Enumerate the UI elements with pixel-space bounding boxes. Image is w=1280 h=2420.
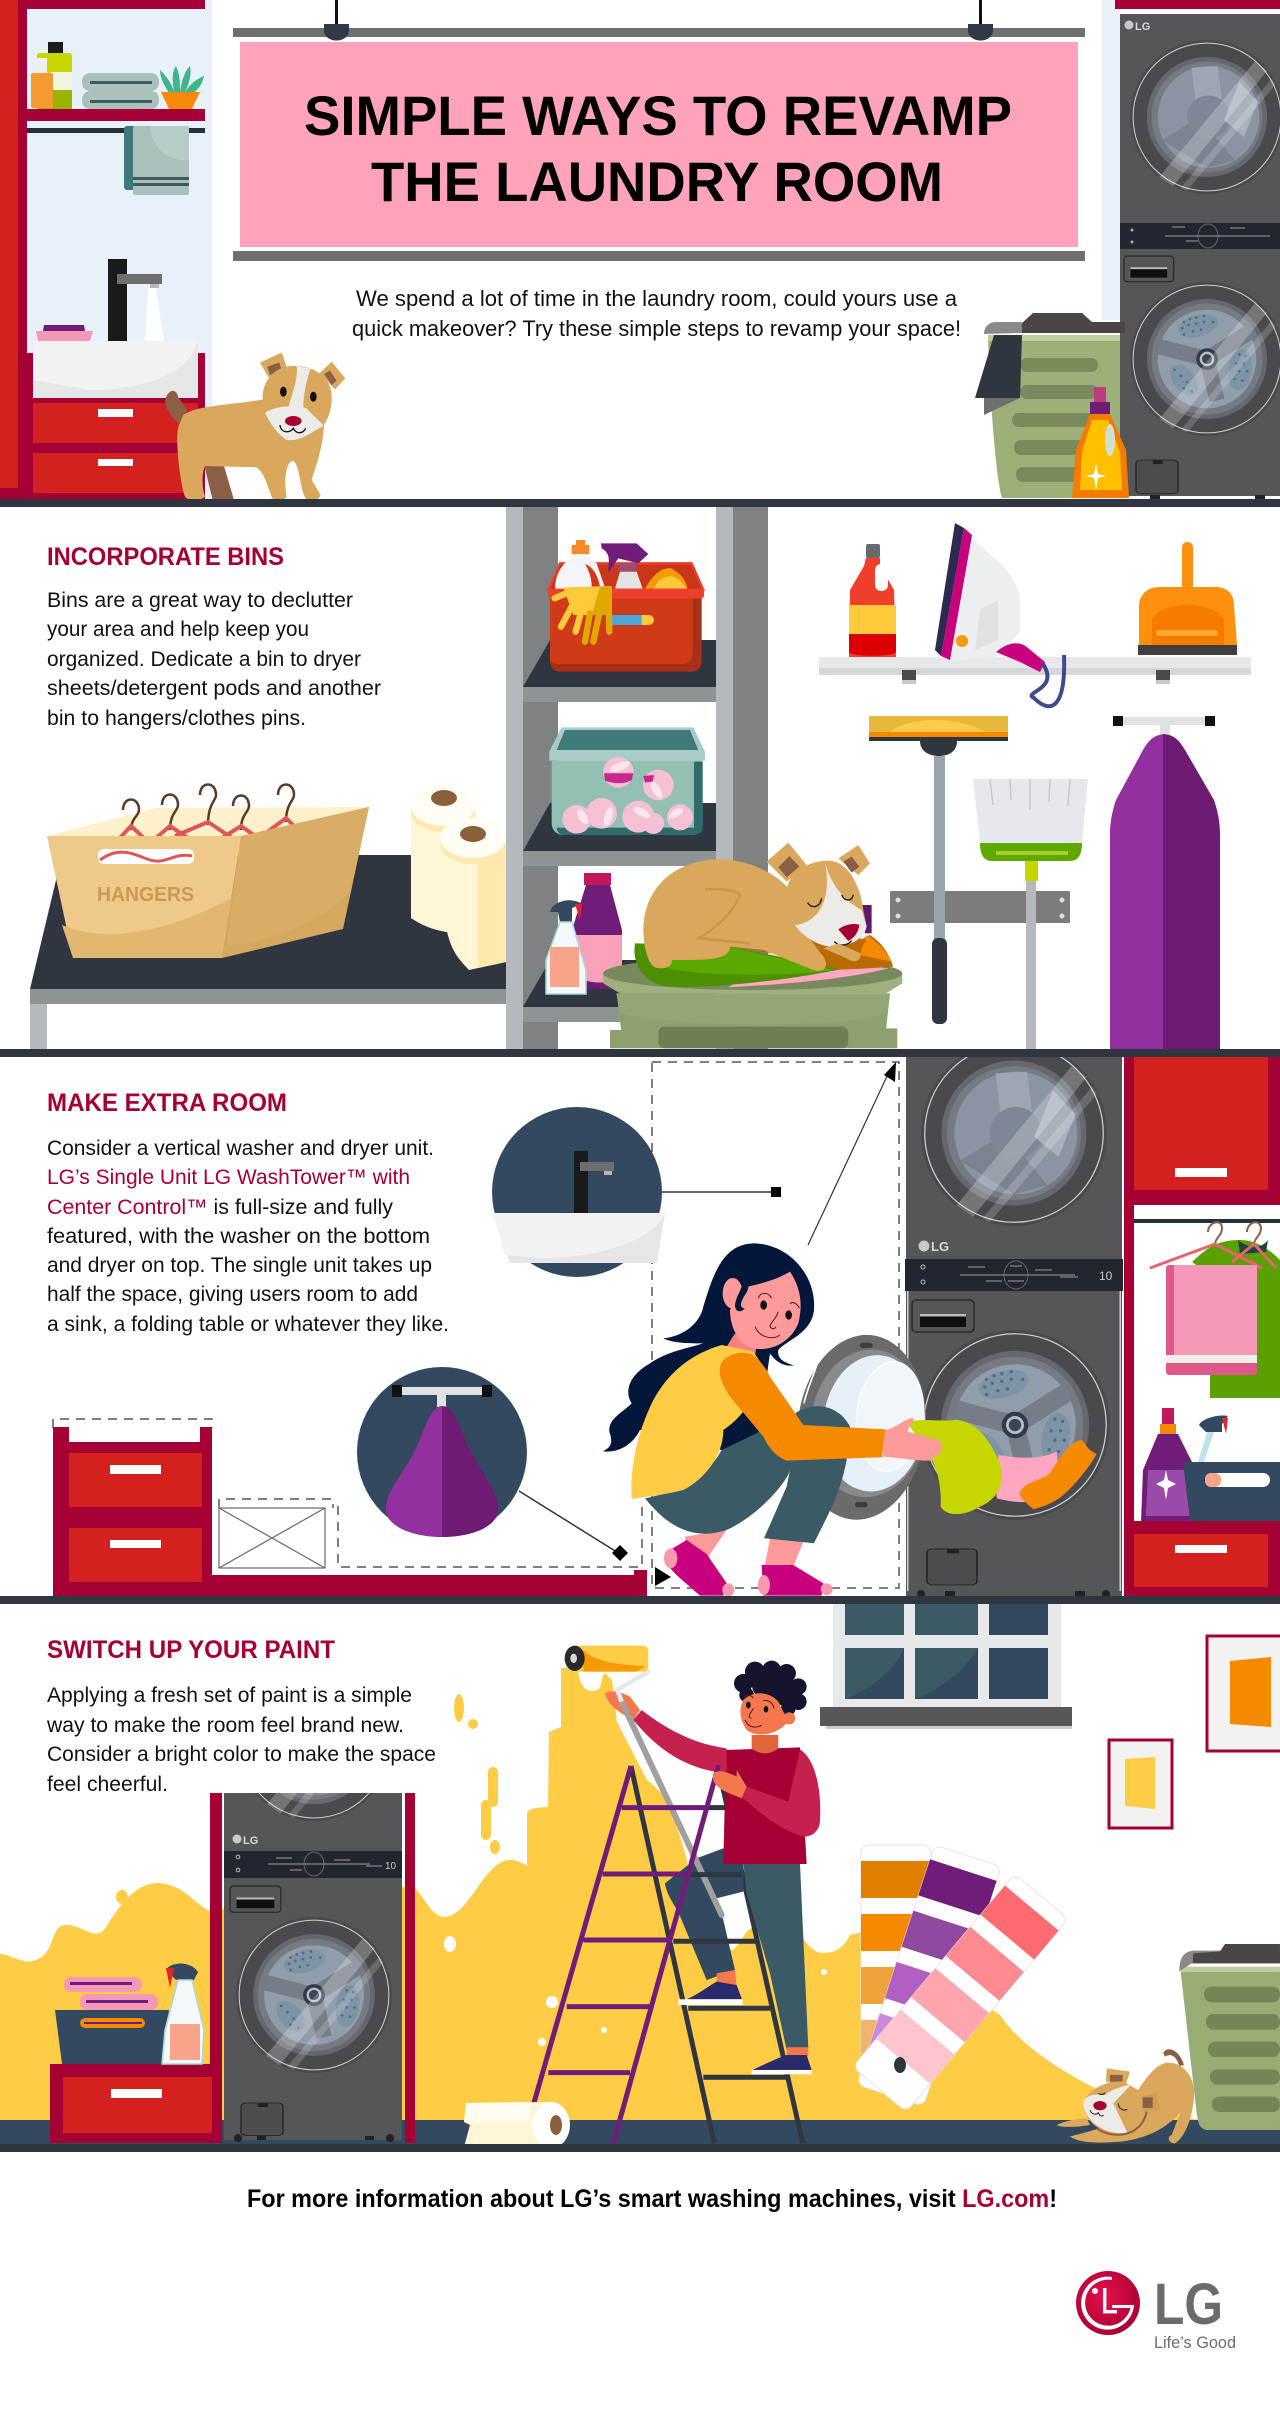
skin legs xyxy=(685,1530,803,1567)
icon: purple detergent and bin xyxy=(1141,1408,1280,1521)
bin body xyxy=(550,597,702,672)
roller pole xyxy=(622,1702,722,1915)
blue floor xyxy=(0,2120,1280,2145)
body text: way to make the room feel brand new. xyxy=(46,1714,404,1737)
sleeve xyxy=(720,1353,886,1461)
front leg xyxy=(743,1863,808,2050)
icon: ironing board xyxy=(1110,716,1220,1049)
icon: red drawer xyxy=(50,2064,222,2143)
neck xyxy=(727,1333,757,1356)
icon: wall rack xyxy=(890,891,1070,923)
panel: header laundry room xyxy=(0,0,1280,502)
sweater xyxy=(723,1747,807,1864)
body text xyxy=(47,1137,449,1336)
icon: bottles on shelf xyxy=(31,42,72,109)
icon: teal pods bin xyxy=(549,727,705,835)
floor bar 1 xyxy=(0,499,1280,507)
icon: basket and stretching dog xyxy=(1057,1944,1280,2143)
hand xyxy=(883,1418,942,1461)
banner with title: THE LAUNDRY ROOM xyxy=(371,150,943,213)
heading: MAKE EXTRA ROOM xyxy=(47,1089,287,1117)
body text: LG’s Single Unit LG WashTower™ with xyxy=(47,1166,410,1189)
floor bar 2 xyxy=(0,1049,1280,1057)
dashed planning guides xyxy=(53,1062,899,1588)
white drip notch xyxy=(578,1670,612,1691)
icon: detergent bottle xyxy=(1072,387,1129,498)
dark shirt xyxy=(722,1418,760,1450)
intro text: We spend a lot of time in the laundry room, could yours use a xyxy=(356,286,958,311)
icon: broom xyxy=(973,779,1088,1049)
body text: Consider a bright color to make the space xyxy=(47,1743,436,1766)
heading: INCORPORATE BINS xyxy=(47,543,284,571)
dog xyxy=(1057,2049,1194,2143)
icon: clothes iron xyxy=(935,523,1064,706)
hair xyxy=(603,1243,814,1452)
icon: spray bottle xyxy=(162,1964,204,2064)
back leg xyxy=(665,1848,743,1980)
body text: feel cheerful. xyxy=(47,1773,168,1796)
washer tower: LG xyxy=(243,1835,258,1847)
socks xyxy=(664,1540,833,1597)
icon: squeegee mop xyxy=(869,716,1008,1024)
floor bar 4 xyxy=(0,2144,1280,2152)
intro text xyxy=(352,286,961,341)
icon: potted plant xyxy=(160,66,204,109)
banner with title xyxy=(240,42,1078,247)
banner with title: SIMPLE WAYS TO REVAMP xyxy=(304,84,1012,147)
heading: SWITCH UP YOUR PAINT xyxy=(47,1636,335,1664)
icon: hanging towel xyxy=(124,126,189,195)
facial features xyxy=(743,1695,774,1727)
pod highlights xyxy=(575,759,685,827)
icon: purple bottle xyxy=(572,873,622,989)
neck xyxy=(752,1735,778,1753)
icon: left red cabinet xyxy=(53,1427,647,1597)
arrow: up to tower top xyxy=(808,1062,896,1245)
arrow: to ironing board circle xyxy=(519,1491,628,1561)
body text xyxy=(46,1684,436,1796)
back ladder rails xyxy=(631,1766,803,2143)
handle slot xyxy=(608,615,654,625)
raised hand xyxy=(605,1691,640,1720)
icon: woman loading washer xyxy=(603,1243,1097,1597)
orange swatch xyxy=(861,1845,931,2083)
icon: sink in circle xyxy=(492,1107,665,1277)
body text: Bins are a great way to declutter xyxy=(47,589,353,612)
left wall and shelves xyxy=(0,0,212,499)
washer tower xyxy=(905,1040,1123,1598)
window xyxy=(820,1604,1072,1729)
icon: banner hangers xyxy=(324,0,993,40)
body text xyxy=(47,589,381,730)
hair strand xyxy=(735,1273,749,1311)
detergent pods xyxy=(562,757,693,834)
pink swatch xyxy=(853,1874,1068,2112)
panel: make extra room xyxy=(47,1040,1280,1598)
white bottle xyxy=(555,540,605,589)
back arm xyxy=(742,1749,820,1837)
basket xyxy=(1179,1944,1280,2130)
icon: hangers box: HANGERS xyxy=(97,884,194,906)
icon: hangers box xyxy=(47,784,369,958)
body text: organized. Dedicate a bin to dryer xyxy=(47,648,361,671)
icon: hanging shirt and towel xyxy=(1150,1222,1280,1398)
hair xyxy=(734,1661,807,1716)
LG logo: LG xyxy=(1154,2272,1223,2337)
body text: sheets/detergent pods and another xyxy=(47,677,381,700)
icon: spray bottle xyxy=(546,900,586,994)
arrow: pointer at tower base xyxy=(655,1567,671,1586)
pants xyxy=(645,1432,847,1543)
sponge xyxy=(645,568,687,589)
intro text: quick makeover? Try these simple steps to revamp your space! xyxy=(352,316,961,341)
icon: red bottle xyxy=(849,544,896,657)
roller arm xyxy=(617,1671,650,1702)
washer tower: 10 xyxy=(385,1861,397,1872)
picture frame large xyxy=(1207,1636,1280,1751)
yellow paint xyxy=(0,1668,1200,2120)
front ladder xyxy=(533,1765,787,2143)
icon: blue bin with towels xyxy=(55,1977,169,2064)
paint white specks xyxy=(444,1936,827,2046)
washer tower: 10 xyxy=(1099,1269,1113,1283)
LG logo xyxy=(1076,2271,1236,2352)
purple swatch xyxy=(857,1845,1001,2106)
vest xyxy=(631,1345,763,1499)
body text: Applying a fresh set of paint is a simple xyxy=(47,1684,412,1707)
icon: washer door xyxy=(788,1328,935,1526)
panel: incorporate bins xyxy=(30,507,1251,1049)
icon: paper towels xyxy=(411,786,506,970)
LG logo: Life’s Good xyxy=(1154,2333,1236,2352)
spray bottle xyxy=(601,543,648,589)
icon: sleeping dog on basket xyxy=(603,843,902,1048)
body text: half the space, giving users room to add xyxy=(47,1283,418,1306)
knee xyxy=(790,1406,850,1460)
body text: a sink, a folding table or whatever they like. xyxy=(47,1313,449,1336)
facial features xyxy=(755,1293,799,1338)
floor bar 3 xyxy=(0,1596,1280,1604)
footer text: For more information about LG’s smart washing machines, visit LG.com! xyxy=(247,2185,1057,2213)
icon: paper roll xyxy=(464,2102,570,2148)
icon: laundry basket xyxy=(975,313,1125,498)
washer tower xyxy=(210,1793,415,2143)
body text: Consider a vertical washer and dryer unit. xyxy=(47,1137,434,1160)
icon: right red cabinet xyxy=(1124,1057,1280,1597)
icon: standing dog xyxy=(165,353,345,502)
body text: and dryer on top. The single unit takes up xyxy=(47,1254,432,1277)
body text: your area and help keep you xyxy=(47,618,309,641)
ear xyxy=(783,1712,795,1724)
orange laundry xyxy=(1019,1440,1097,1509)
icon: red cleaning bin xyxy=(548,540,704,672)
holding hand xyxy=(713,1770,747,1798)
roller xyxy=(565,1646,648,1672)
pink laundry xyxy=(997,1452,1060,1502)
gloves xyxy=(555,586,612,642)
icon: sink cabinet xyxy=(27,259,205,499)
icon: paint roller, painter and ladder xyxy=(533,1646,820,2143)
icon: dustpan xyxy=(1138,542,1237,655)
face xyxy=(730,1272,801,1349)
shoes xyxy=(678,1970,812,2074)
shelving unit xyxy=(506,507,768,1049)
washer tower: LG xyxy=(931,1239,949,1254)
body text: bin to hangers/clothes pins. xyxy=(47,707,306,730)
picture frame small xyxy=(1109,1740,1172,1828)
washer dryer tower: LG xyxy=(1135,21,1150,33)
panel: switch up your paint xyxy=(0,1604,1280,2148)
folding table xyxy=(30,855,506,1049)
arrow: to sink circle xyxy=(662,1187,781,1197)
body text: featured, with the washer on the bottom xyxy=(47,1225,430,1248)
icon: ironing board in circle xyxy=(357,1367,527,1537)
washer dryer tower xyxy=(1102,0,1280,499)
green towel xyxy=(907,1420,1002,1514)
head xyxy=(740,1693,788,1734)
ear xyxy=(723,1278,743,1309)
banner rods xyxy=(233,28,1085,261)
icon: paint swatches xyxy=(853,1845,1068,2112)
paint drips xyxy=(116,1694,500,1904)
icon: folded towels xyxy=(82,73,159,109)
body text: Center Control™ is full-size and fully xyxy=(47,1196,393,1219)
icon: crossed-out box xyxy=(219,1508,325,1568)
raised arm xyxy=(633,1710,727,1773)
icon: shelf with items xyxy=(819,657,1251,684)
